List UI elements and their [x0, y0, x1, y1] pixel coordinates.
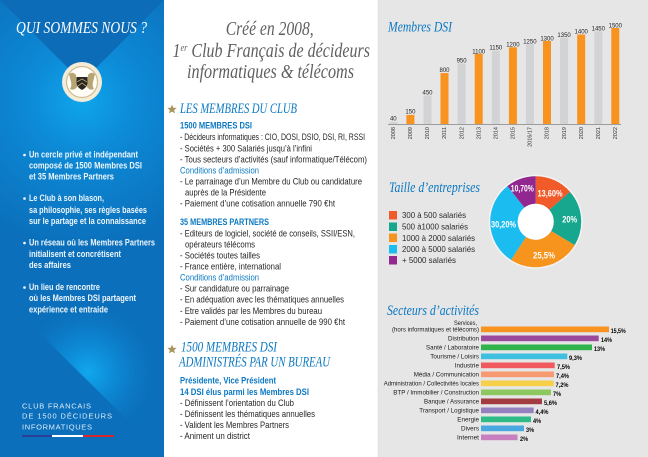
bar chart: membres DSI: 2008 [391, 127, 397, 139]
bar chart: secteurs d'activités: Média / Communication [414, 372, 479, 378]
bar chart: secteurs d'activités: 15,5% [611, 329, 626, 335]
icon: club crest [62, 62, 102, 102]
text block: lieu de rencontre: où les Membres DSI partagent [29, 293, 137, 304]
text block: club français: CLUB FRANCAIS [22, 401, 91, 410]
heading: 1500 membres DSI administrés: 1500 MEMBRES DSI [181, 340, 278, 356]
text block: 1500 membres DSI: Conditions d’admission [180, 165, 259, 176]
bar chart: secteurs d'activités: 4,4% [536, 410, 549, 416]
bar chart: membres DSI: 40 [390, 117, 397, 123]
bar chart: membres DSI: 150 [405, 110, 416, 116]
bar chart: secteurs d'activités: 3% [526, 428, 535, 434]
text block: 1500 membres DSI: - Paiement d’une cotisation annuelle 790 €ht [180, 199, 335, 210]
heading: membres DSI: Membres DSI [387, 20, 453, 36]
text block: bureau [180, 375, 315, 442]
bar chart: membres DSI: 2018 [545, 127, 551, 139]
text block: 1500 membres DSI: 1500 MEMBRES DSI [180, 121, 252, 132]
bar chart: membres DSI: 800 [439, 68, 450, 74]
bar chart: membres DSI: 2020 [579, 127, 585, 139]
text block: réseau: des affaires [29, 260, 71, 271]
legend: taille d'entreprises: + 5000 salariés [402, 255, 456, 265]
text block: 35 membres partners: - Editeurs de logiciel, société de conseils, SSII/ESN, [180, 229, 355, 240]
bar chart: secteurs d'activités: 7% [553, 392, 562, 398]
bar chart: secteurs d'activités: BTP / Immobilier / Construction [393, 390, 479, 396]
legend: taille d'entreprises: 1000 à 2000 salariés [402, 233, 475, 243]
bar chart: membres DSI: 2021 [596, 127, 602, 139]
title: créé en 2008 [172, 19, 370, 83]
bar chart: membres DSI: 2019 [562, 127, 568, 139]
bar chart: membres DSI: 2010 [425, 127, 431, 139]
text block: 1500 membres DSI: - Tous secteurs d’activités (sauf informatique/Télécom) [180, 155, 367, 166]
bar chart: membres DSI: 2013 [476, 127, 482, 139]
bar chart: secteurs d'activités: 7,5% [557, 365, 571, 371]
donut chart: taille d'entreprises: 13,60% [538, 188, 563, 200]
section: bureau [167, 340, 331, 442]
text block: 1500 membres DSI: auprès de la Présidente [185, 187, 266, 198]
bar chart: secteurs d'activités: Divers [461, 426, 480, 432]
text block: réseau: Un réseau où les Membres Partners [29, 238, 155, 249]
text block: blason: sa philosophie, ses règles basées [29, 205, 147, 216]
donut chart: taille d'entreprises: 10,70% [511, 184, 534, 194]
icon: star [167, 104, 177, 113]
bar chart: membres DSI: 2009 [408, 127, 414, 139]
bar chart: secteurs d'activités: Internet [457, 434, 479, 442]
bar chart: membres DSI: 1150 [489, 46, 503, 52]
title: créé en 2008: informatiques & télécoms [187, 62, 354, 83]
legend: taille d'entreprises: 300 à 500 salariés [402, 210, 466, 220]
bar chart: secteurs d'activités: Distribution [448, 336, 479, 342]
bar chart: secteurs d'activités: (hors informatiques et télécoms) [392, 326, 479, 334]
bar chart: secteurs d'activités: Santé / Laboratoire [426, 344, 479, 352]
panel: who are we [0, 0, 164, 457]
text block: bureau: Présidente, Vice Président [180, 375, 277, 386]
bar chart: membres DSI: 2016/17 [528, 127, 534, 147]
bar chart: secteurs d'activités: 5,6% [544, 401, 558, 407]
bar chart: membres DSI: 450 [422, 90, 433, 96]
bar chart: membres DSI: 1100 [472, 49, 486, 55]
bar chart: secteurs d'activités: 7,4% [556, 374, 570, 380]
icon: star [167, 344, 177, 353]
bar chart: secteurs d'activités: Banque / Assurance [424, 398, 479, 406]
heading: 1500 membres DSI administrés [178, 340, 331, 371]
text block: bureau: - Valident les Membres Partners [180, 420, 289, 431]
bar chart: secteurs d'activités: 9,3% [569, 356, 583, 362]
bar chart: membres DSI: 1400 [575, 30, 589, 36]
bar chart: membres DSI: 1500 [609, 23, 623, 29]
bar chart: membres DSI [388, 23, 623, 147]
text block: réseau: initialisent et concrétisent [29, 249, 122, 260]
bar chart: membres DSI: 2022 [613, 127, 619, 139]
bar chart: membres DSI: 1350 [557, 33, 571, 39]
bar chart: membres DSI: 1450 [592, 26, 606, 32]
heading: 1500 membres DSI administrés: ADMINISTRÉS PAR UN BUREAU [178, 354, 331, 371]
bar chart: membres DSI: 2015 [511, 127, 517, 139]
text block: lieu de rencontre [23, 282, 137, 315]
donut chart: taille d'entreprises: 30,20% [491, 220, 516, 230]
bar chart: membres DSI: 2011 [442, 127, 448, 139]
text block: club français [22, 401, 112, 431]
bar chart: secteurs d'activités [384, 320, 626, 443]
text block: 1500 membres DSI: - Le parrainage d’un Membre du Club ou candidature [180, 177, 362, 188]
icon: french flag stripe [22, 435, 114, 437]
panel: center background [164, 0, 379, 457]
bar chart: secteurs d'activités: 13% [594, 347, 606, 353]
text block: blason [23, 193, 147, 227]
text block: bureau: - Animent un district [180, 431, 250, 442]
bar chart: secteurs d'activités: Administration / Collectivités locales [384, 380, 480, 388]
text block: 35 membres partners: - Paiement d’une cotisation annuelle de 990 €ht [180, 317, 345, 328]
text block: club français: DE 1500 DÉCIDEURS [22, 412, 112, 421]
text block: 35 membres partners: opérateurs télécoms [185, 240, 255, 251]
bar chart: membres DSI: 1200 [506, 42, 520, 48]
text block: 35 membres partners: - France entière, international [180, 262, 281, 273]
text block: 1500 membres DSI [180, 121, 367, 210]
text block: cercle privé [23, 150, 142, 182]
text block: 35 membres partners: - Sur candidature ou parrainage [180, 284, 289, 295]
bar chart: secteurs d'activités: Tourisme / Loisirs [430, 354, 480, 360]
bar chart: secteurs d'activités: 4% [533, 419, 542, 425]
text block: 1500 membres DSI: - Décideurs informatiques : CIO, DOSI, DSIO, DSI, RI, RSSI [180, 132, 365, 143]
heading: taille d'entreprises: Taille d’entreprises [389, 180, 480, 196]
heading: qui sommes nous: QUI SOMMES NOUS ? [16, 18, 147, 37]
bar chart: secteurs d'activités: Energie [457, 416, 479, 424]
text block: cercle privé: Un cercle privé et indépendant [29, 150, 139, 160]
bar chart: secteurs d'activités: Industrie [455, 362, 479, 370]
title: créé en 2008: er [181, 43, 187, 54]
bar chart: secteurs d'activités: 7,2% [556, 383, 569, 389]
text block: 35 membres partners: - Etre validés par les Membres du bureau [180, 306, 322, 317]
text block: 35 membres partners: - Sociétés toutes tailles [180, 251, 260, 262]
section: les membres du club [167, 101, 367, 328]
donut chart: taille d'entreprises: 20% [562, 214, 578, 226]
bar chart: secteurs d'activités: 14% [601, 338, 613, 344]
heading: les membres du club: LES MEMBRES DU CLUB [179, 101, 297, 117]
bar chart: secteurs d'activités: Services, [454, 320, 477, 327]
text block: bureau: - Définissent les thématiques annuelles [180, 409, 315, 420]
legend: taille d'entreprises [389, 210, 475, 265]
legend: taille d'entreprises: 2000 à 5000 salariés [402, 244, 475, 254]
text block: bureau: - Définissent l’orientation du Club [180, 398, 294, 409]
text block: bureau: 14 DSI élus parmi les Membres DSI [180, 387, 309, 398]
text block: 35 membres partners: Conditions d’admission [180, 272, 259, 283]
bar chart: membres DSI: 950 [457, 58, 467, 64]
text block: 35 membres partners: 35 MEMBRES PARTNERS [180, 217, 269, 228]
donut chart: taille d'entreprises: 25,5% [533, 250, 555, 262]
text block: 35 membres partners: - En adéquation avec les thématiques annuelles [180, 295, 344, 306]
heading: secteurs d'activités: Secteurs d’activités [387, 303, 479, 319]
legend: taille d'entreprises: 500 à1000 salariés [402, 222, 468, 232]
donut chart: taille d'entreprises [489, 175, 583, 269]
bar chart: secteurs d'activités: 2% [520, 437, 529, 443]
text block: 35 membres partners [180, 217, 355, 328]
text block: cercle privé: et 35 Membres Partners [29, 172, 114, 182]
bar chart: membres DSI: 2014 [494, 127, 500, 139]
title: créé en 2008: 1 [172, 41, 182, 62]
panel: right background [379, 0, 648, 457]
text block: blason: sur le partage et la connaissance [29, 216, 146, 227]
text block: lieu de rencontre: Un lieu de rencontre [29, 282, 100, 293]
bar chart: membres DSI: 2012 [459, 127, 465, 139]
text block: réseau [23, 238, 155, 271]
text block: cercle privé: composé de 1500 Membres DSI [29, 160, 142, 172]
text block: blason: Le Club à son blason, [29, 193, 104, 204]
title: créé en 2008: Créé en 2008, [226, 19, 314, 40]
bar chart: membres DSI: 1250 [523, 39, 537, 45]
text block: club français: INFORMATIQUES [22, 422, 92, 431]
bar chart: secteurs d'activités: Transport / Logistique [419, 408, 479, 414]
text block: 1500 membres DSI: - Sociétés + 300 Salariés jusqu’à l’infini [180, 144, 312, 154]
bar chart: membres DSI: 1300 [540, 36, 554, 42]
title: créé en 2008: Club Français de décideurs [187, 41, 370, 62]
text block: lieu de rencontre: expérience et entraide [29, 304, 108, 315]
